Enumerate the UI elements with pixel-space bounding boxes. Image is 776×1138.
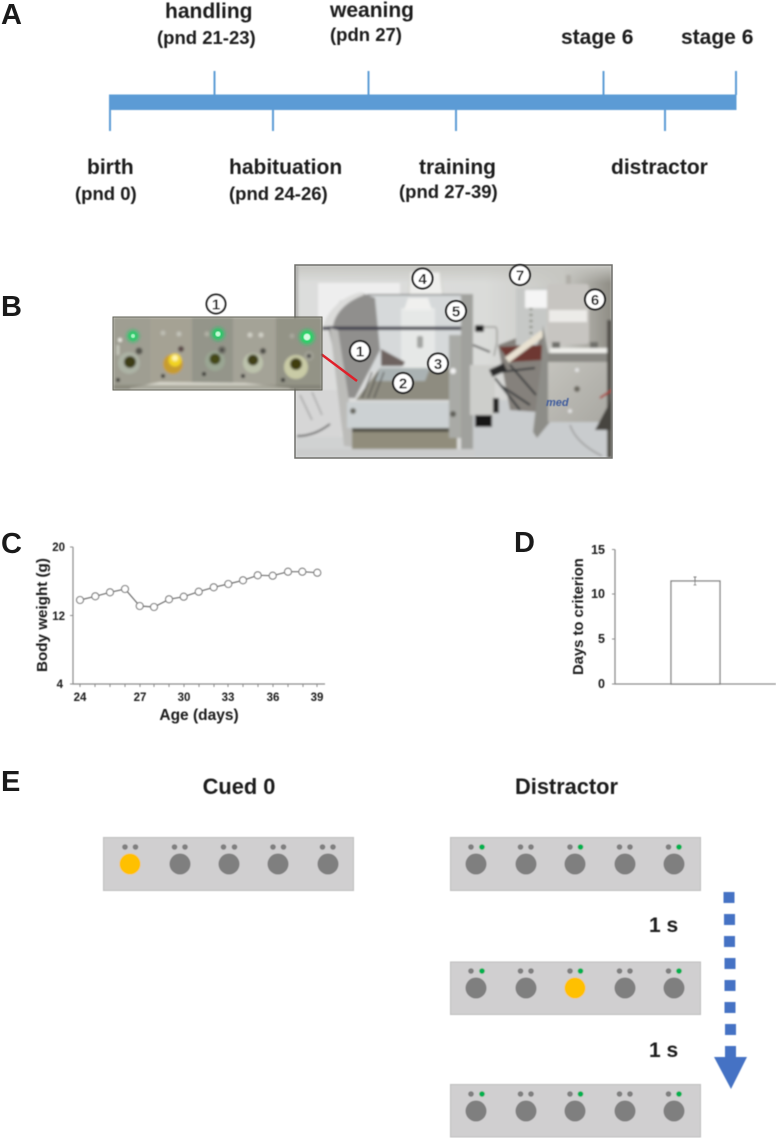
- panel label D: D: [514, 527, 535, 559]
- label: distractor: distractor: [611, 156, 708, 179]
- axis title x: Age (days): [159, 707, 239, 724]
- chamber back panel: [327, 293, 380, 398]
- callout 1: [350, 341, 370, 361]
- floor: [356, 368, 452, 400]
- panel label C: C: [1, 528, 22, 560]
- callout 5: [446, 301, 466, 321]
- dark right cables: [607, 320, 612, 458]
- bar: [322, 326, 472, 330]
- panel E: heading Distractor: Distractor: [515, 774, 618, 799]
- numbered callouts: [206, 265, 605, 393]
- label: pnd 21-23: (pnd 21-23): [157, 27, 256, 48]
- med logo text: med: [546, 397, 569, 409]
- chamber interior: [370, 295, 401, 302]
- left device and cable: [296, 390, 299, 438]
- label: 1 s upper: 1 s: [649, 914, 678, 937]
- label: habituation: habituation: [229, 156, 342, 179]
- axis title y: Body weight (g): [34, 558, 51, 672]
- panel B: apparatus photo: [295, 265, 612, 458]
- label: stage 6: stage 6: [561, 26, 633, 49]
- axes: [615, 550, 776, 684]
- label: training: training: [419, 156, 496, 179]
- timeline ticks: [110, 71, 736, 131]
- x tick labels: 39: [311, 692, 323, 704]
- panel D: days to criterion bar chart: [571, 543, 776, 691]
- data markers: [76, 568, 321, 610]
- panel C: body weight line chart: 12: [52, 611, 65, 623]
- x tick labels: 24: [74, 692, 87, 704]
- label: stage 6 right: stage 6: [681, 26, 753, 49]
- label: 1 s lower: 1 s: [649, 1039, 678, 1062]
- x tick labels: [74, 692, 323, 704]
- panel label E: E: [1, 766, 20, 798]
- med box: [548, 362, 607, 422]
- hole panel: cued 0: [104, 838, 354, 890]
- y tick labels: [591, 543, 605, 691]
- y tick labels: 20: [52, 542, 65, 554]
- label: handling: handling: [165, 0, 252, 23]
- callout 3: [428, 354, 448, 374]
- panel C: body weight line chart: 4: [57, 679, 64, 691]
- hole panel: distractor 3: [450, 1084, 700, 1137]
- base plate: [552, 342, 560, 348]
- label: pdn 27: (pdn 27): [330, 24, 402, 45]
- y tick labels: 5: [598, 632, 605, 646]
- back panel 7: [516, 288, 547, 345]
- bar: [671, 581, 720, 684]
- photo border: [295, 265, 612, 458]
- y tick labels: 15: [591, 543, 605, 557]
- callout 6: [585, 290, 605, 310]
- connector: [475, 325, 484, 332]
- callout 1: 1: [356, 344, 364, 360]
- cylinder: [570, 284, 590, 344]
- x tick labels: 36: [267, 692, 279, 704]
- arrow: dashed downward time arrow: [714, 892, 747, 1089]
- axis title: Days to criterion: [571, 558, 587, 675]
- callout 7: [510, 265, 530, 285]
- panel label B: B: [1, 291, 22, 323]
- panel C: body weight line chart: [34, 542, 325, 724]
- side face: [533, 325, 550, 438]
- callout 1 top: 1: [212, 296, 220, 314]
- y tick labels: 10: [591, 587, 605, 601]
- label: pnd 27-39: (pnd 27-39): [399, 181, 498, 202]
- panel E: heading Cued 0: Cued 0: [203, 774, 275, 799]
- callout 7: 7: [516, 268, 524, 284]
- label: pnd 24-26: (pnd 24-26): [229, 183, 328, 204]
- panel A: timeline: [75, 0, 753, 204]
- right strut: [447, 334, 462, 439]
- y tick labels: 0: [598, 677, 605, 691]
- timeline bar: [109, 94, 736, 110]
- hole panel: distractor 2: [450, 962, 700, 1014]
- hole panel: distractor 1: [450, 838, 700, 890]
- label: birth: birth: [87, 156, 134, 179]
- bottle: [409, 272, 443, 296]
- callout 1 top: [206, 294, 226, 314]
- red pointer line: [321, 354, 357, 381]
- white rod: [507, 333, 543, 360]
- callout 6: 6: [591, 292, 599, 309]
- wires: [497, 337, 544, 413]
- callout 3: 3: [434, 356, 442, 373]
- inset border: [113, 317, 322, 390]
- callout 2: [393, 373, 413, 393]
- callout 5: 5: [452, 304, 460, 320]
- panel B: inset photo of holes: [113, 317, 322, 390]
- x tick labels: 33: [222, 692, 234, 704]
- module box: [470, 365, 495, 415]
- callout 4: 4: [418, 271, 427, 288]
- front plate: [347, 402, 457, 428]
- x tick labels: 27: [134, 692, 146, 704]
- callout 2: 2: [399, 376, 407, 392]
- callout 4: [412, 268, 432, 288]
- wedge: [381, 349, 405, 366]
- x tick labels: 30: [178, 692, 190, 704]
- data line: [80, 572, 317, 607]
- label: pnd 0: (pnd 0): [75, 183, 137, 204]
- error bar: [694, 577, 696, 585]
- left strut: [330, 328, 354, 447]
- axes: [73, 547, 325, 684]
